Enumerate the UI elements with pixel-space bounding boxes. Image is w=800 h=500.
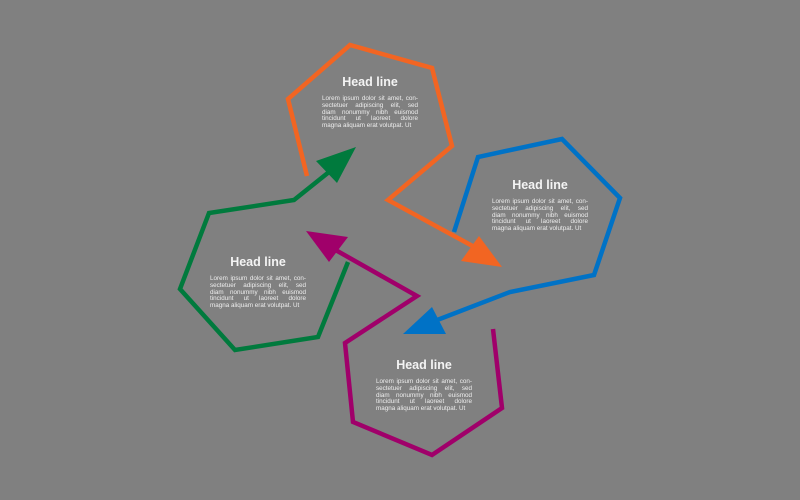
shape: orange hexagon arrow xyxy=(288,45,502,267)
text block: green: sectetuer adipiscing elit, sed xyxy=(210,282,306,289)
text block: green: Lorem ipsum dolor sit amet, con- xyxy=(210,275,306,282)
text block: blue xyxy=(492,178,588,232)
text block: magenta: Head line xyxy=(396,358,452,372)
text block: magenta: diam nonummy nibh euismod xyxy=(376,392,472,399)
shape: magenta hexagon arrow xyxy=(306,231,502,455)
shape: green hexagon arrow xyxy=(180,147,356,350)
text block: orange: tincidunt ut laoreet dolore xyxy=(322,115,418,122)
text block: green: Head line xyxy=(230,255,286,269)
text block: blue: sectetuer adipiscing elit, sed xyxy=(492,205,588,212)
text block: blue: magna aliquam erat volutpat. Ut xyxy=(492,225,581,232)
text block: green: tincidunt ut laoreet dolore xyxy=(210,295,306,302)
text block: orange: Lorem ipsum dolor sit amet, con- xyxy=(322,95,418,102)
text block: orange: magna aliquam erat volutpat. Ut xyxy=(322,122,411,129)
text block: blue: Head line xyxy=(512,178,568,192)
text block: green xyxy=(210,255,306,309)
text block: orange: diam nonummy nibh euismod xyxy=(322,109,418,116)
text block: magenta: tincidunt ut laoreet dolore xyxy=(376,398,472,405)
text block: blue: tincidunt ut laoreet dolore xyxy=(492,218,588,225)
text block: magenta: sectetuer adipiscing elit, sed xyxy=(376,385,472,392)
text block: orange: Head line xyxy=(342,75,398,89)
text block: orange: sectetuer adipiscing elit, sed xyxy=(322,102,418,109)
text block: green: magna aliquam erat volutpat. Ut xyxy=(210,302,299,309)
text block: orange xyxy=(322,75,418,129)
text block: magenta xyxy=(376,358,472,412)
text block: blue: Lorem ipsum dolor sit amet, con- xyxy=(492,198,588,205)
text block: magenta: magna aliquam erat volutpat. Ut xyxy=(376,405,465,412)
shape: blue hexagon arrow xyxy=(403,139,620,334)
text block: green: diam nonummy nibh euismod xyxy=(210,289,306,296)
text block: magenta: Lorem ipsum dolor sit amet, con- xyxy=(376,378,472,385)
text block: blue: diam nonummy nibh euismod xyxy=(492,212,588,219)
